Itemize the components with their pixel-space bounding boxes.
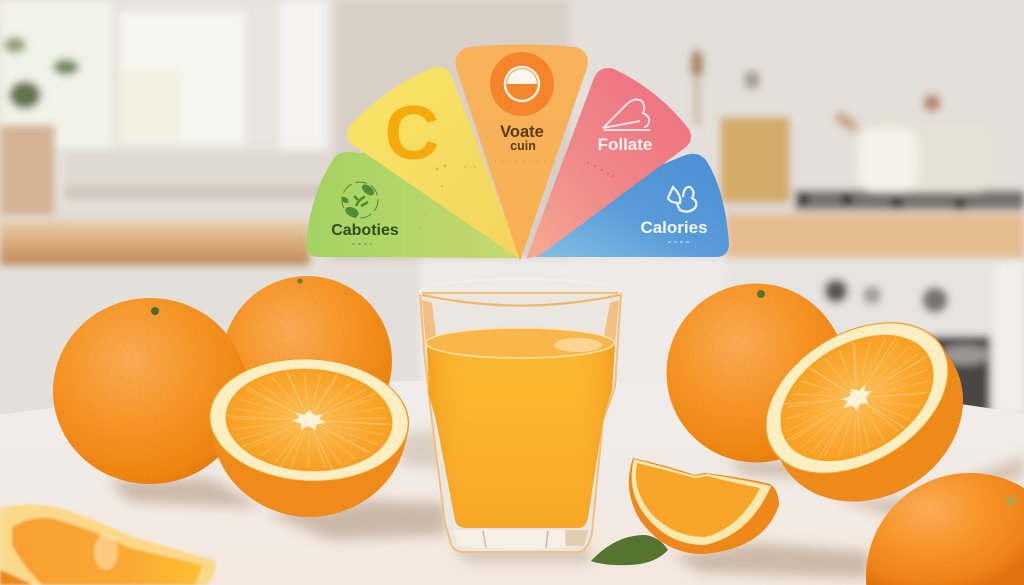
wedge flesh [636,463,760,537]
segment: blue [536,154,729,257]
orange dots [495,160,545,162]
fan chart [306,44,729,261]
orange: front left [53,298,247,484]
surface highlight [554,338,602,352]
juice shading [427,345,615,528]
pink dots [587,162,614,177]
orange: right [666,284,846,462]
orange wedge [629,458,779,554]
segment: orange [456,44,588,261]
wedge peel [629,458,779,554]
yellow dots [419,164,476,229]
juice surface [426,328,614,358]
juice [427,345,615,528]
orange slice: bottom left [0,504,215,585]
segment: green [306,150,521,258]
glass base [453,530,588,549]
label: Calories: Calories [640,218,708,237]
glass rim [420,279,620,306]
icon: clover outline [668,187,696,212]
green dashes [352,244,372,245]
orange half: right [765,322,963,502]
label: Follate: Follate [598,135,652,154]
orange half: centre left [206,354,412,517]
kitchen background [0,0,1024,415]
icon: heart outline [603,99,650,130]
glass of juice [420,279,621,552]
glass wall tint left [422,300,436,345]
icon: letter C: C [385,91,439,176]
label: Voate: Voate [500,123,544,141]
orange: bottom right [866,473,1024,585]
segment: pink [526,68,691,259]
segment: yellow [347,67,520,258]
label: Caboties: Caboties [331,222,399,239]
wedge pith [632,459,771,545]
label: cuin: cuin [510,139,536,153]
table shadows [107,432,1024,578]
table [0,381,1024,585]
orange: back left [226,276,392,386]
leaf [591,535,668,565]
glass body [420,293,621,552]
icon: circle gauge [490,52,554,116]
glass wall tint right [604,300,619,345]
icon: leaves [340,182,378,219]
blue dashes [668,242,689,243]
